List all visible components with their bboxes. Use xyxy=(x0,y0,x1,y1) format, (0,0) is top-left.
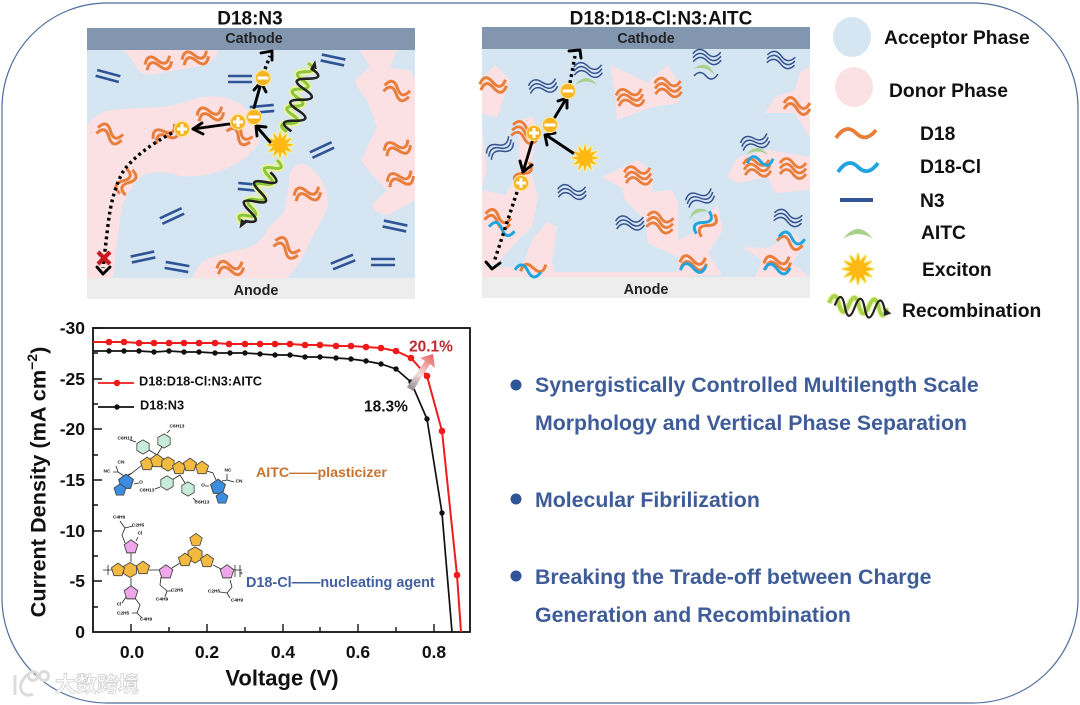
legend: exciton: Exciton xyxy=(922,260,992,281)
label: AITC plasticizer: AITC——plasticizer xyxy=(256,465,387,481)
cathode bar xyxy=(482,27,810,49)
y axis tick labels: -5 xyxy=(69,571,85,591)
D18-Cl atom labels: C2H5 xyxy=(117,610,129,616)
AITC atom labels: C6H13 xyxy=(170,424,185,430)
legend: exciton xyxy=(842,253,992,285)
x axis tick labels: 0.8 xyxy=(422,642,446,662)
anode bar xyxy=(482,277,810,298)
donor phase domains xyxy=(482,65,810,277)
finding 3: Generation and Recombination xyxy=(535,603,851,627)
dotted charge transport paths xyxy=(97,51,272,274)
D18-Cl chains xyxy=(488,153,805,278)
exciton star xyxy=(571,144,599,172)
legend: D18: D18 xyxy=(920,124,956,145)
finding 1: Morphology and Vertical Phase Separation xyxy=(535,411,967,435)
legend: donor phase xyxy=(835,67,1008,107)
D18-Cl atom labels: C2H5 xyxy=(171,588,183,594)
acceptor phase background xyxy=(87,50,415,278)
charge transfer arrows xyxy=(193,82,270,142)
dotted charge transport paths xyxy=(486,50,581,269)
anode bar: Anode xyxy=(624,282,668,298)
recombination loss marker xyxy=(98,252,110,264)
y axis title: −2 xyxy=(24,354,40,370)
legend: D18-Cl: D18-Cl xyxy=(920,157,981,178)
finding 1 xyxy=(510,373,979,435)
recombination wave, upper xyxy=(280,56,322,136)
chart legend: binary: D18:N3 xyxy=(140,398,184,412)
charge transfer arrows xyxy=(520,98,573,172)
y axis tick labels: -20 xyxy=(60,419,85,439)
y axis title: ) xyxy=(26,347,50,354)
watermark logo xyxy=(15,672,48,695)
D18 chains xyxy=(479,74,810,277)
legend xyxy=(828,17,1041,322)
legend: recombination xyxy=(828,296,1041,322)
cathode bar: Cathode xyxy=(225,31,283,47)
chart legend: binary xyxy=(98,398,184,412)
acceptor phase background xyxy=(482,49,810,277)
AITC atom labels: CN xyxy=(236,478,243,484)
AITC atom labels: C6H13 xyxy=(140,488,155,494)
legend: N3: N3 xyxy=(920,191,945,212)
heading: D18:N3: D18:N3 xyxy=(217,8,283,30)
label 20.1%: 20.1% xyxy=(409,338,453,356)
label 18.3%: 18.3% xyxy=(364,398,408,416)
molecule: D18-Cl xyxy=(103,514,243,622)
anode bar: Anode xyxy=(234,283,278,299)
AITC atom labels: C6H13 xyxy=(118,436,133,442)
D18-Cl atom labels: n xyxy=(240,572,243,576)
N3 acceptor molecules xyxy=(96,55,407,272)
AITC atom labels: O xyxy=(201,482,205,488)
D18-Cl atom labels: C4H9 xyxy=(140,616,152,622)
N3 wavy aggregates xyxy=(484,48,803,233)
AITC atom labels: CN xyxy=(118,460,125,466)
heading: D18:D18-Cl:N3:AITC: D18:D18-Cl:N3:AITC xyxy=(570,8,753,30)
finding 2: Molecular Fibrilization xyxy=(535,488,760,512)
legend: acceptor phase xyxy=(833,17,1030,57)
cathode bar xyxy=(87,28,415,50)
charge carriers xyxy=(513,83,576,191)
donor phase domains xyxy=(87,50,415,278)
axis ticks xyxy=(93,328,434,632)
y axis title: Current Density (mA cm xyxy=(26,370,50,617)
y axis tick labels: -15 xyxy=(60,470,85,490)
x axis tick labels: 0.2 xyxy=(195,642,219,662)
D18 donor chains xyxy=(95,46,416,280)
exciton star xyxy=(266,131,294,159)
AITC atom labels xyxy=(104,424,243,506)
watermark text: 大数跨境 xyxy=(55,674,139,696)
D18-Cl atom labels: C2H5 xyxy=(208,588,220,594)
x axis title: Voltage (V) xyxy=(225,666,339,690)
AITC crescents xyxy=(575,62,768,220)
efficiency increase arrow xyxy=(407,354,435,391)
legend: donor phase: Donor Phase xyxy=(889,81,1008,102)
label: D18-Cl nucleating agent: D18-Cl——nucleating agent xyxy=(246,575,435,591)
watermark xyxy=(15,672,139,696)
recombination wave, lower xyxy=(232,156,285,233)
AITC atom labels: NC xyxy=(225,468,232,474)
y axis tick labels xyxy=(60,318,85,642)
y axis tick labels: -10 xyxy=(60,521,85,541)
D18-Cl atom labels: Cl xyxy=(138,530,142,536)
legend: D18-Cl xyxy=(838,157,981,178)
D18-Cl atom labels: C2H5 xyxy=(132,522,144,528)
x axis tick labels xyxy=(120,642,446,662)
AITC atom labels: O xyxy=(139,480,143,486)
D18-Cl atom labels: C4H9 xyxy=(113,514,125,520)
D18-Cl atom labels: C4H9 xyxy=(156,596,168,602)
y axis tick labels: -30 xyxy=(60,318,85,338)
legend: recombination: Recombination xyxy=(902,301,1041,322)
x axis tick labels: 0.4 xyxy=(271,642,295,662)
finding 3: Breaking the Trade-off between Charge xyxy=(535,565,932,589)
x axis tick labels: 0.0 xyxy=(120,642,144,662)
AITC atom labels: NC xyxy=(104,468,111,474)
charge carriers xyxy=(174,70,271,137)
chart legend: ternary: D18:D18-Cl:N3:AITC xyxy=(139,374,262,388)
finding 1: Synergistically Controlled Multilength Scale xyxy=(535,373,979,397)
cathode bar: Cathode xyxy=(617,31,675,47)
molecule: AITC xyxy=(104,424,243,506)
legend: AITC xyxy=(843,223,966,244)
AITC atom labels: C6H13 xyxy=(195,500,210,506)
curve: D18:D18-Cl:N3:AITC xyxy=(93,342,461,632)
x axis tick labels: 0.6 xyxy=(346,642,370,662)
J-V chart xyxy=(24,318,470,690)
curve: D18:N3 xyxy=(93,351,452,632)
D18-Cl atom labels: C4H9 xyxy=(231,598,243,604)
legend: D18 xyxy=(836,124,956,145)
finding 3 xyxy=(510,565,932,627)
y axis tick labels: -25 xyxy=(60,369,85,389)
key findings xyxy=(510,373,979,627)
panel: D18:D18-Cl:N3:AITC morphology xyxy=(479,27,810,298)
legend: AITC: AITC xyxy=(921,223,966,244)
D18-Cl atom labels: Cl xyxy=(117,602,121,608)
y axis tick labels: 0 xyxy=(75,622,85,642)
anode bar xyxy=(87,278,415,299)
D18-Cl atom labels xyxy=(113,514,243,622)
plot frame xyxy=(93,328,470,632)
legend: acceptor phase: Acceptor Phase xyxy=(884,28,1030,49)
panel: D18:N3 morphology xyxy=(87,28,416,299)
legend: N3 xyxy=(840,191,945,212)
